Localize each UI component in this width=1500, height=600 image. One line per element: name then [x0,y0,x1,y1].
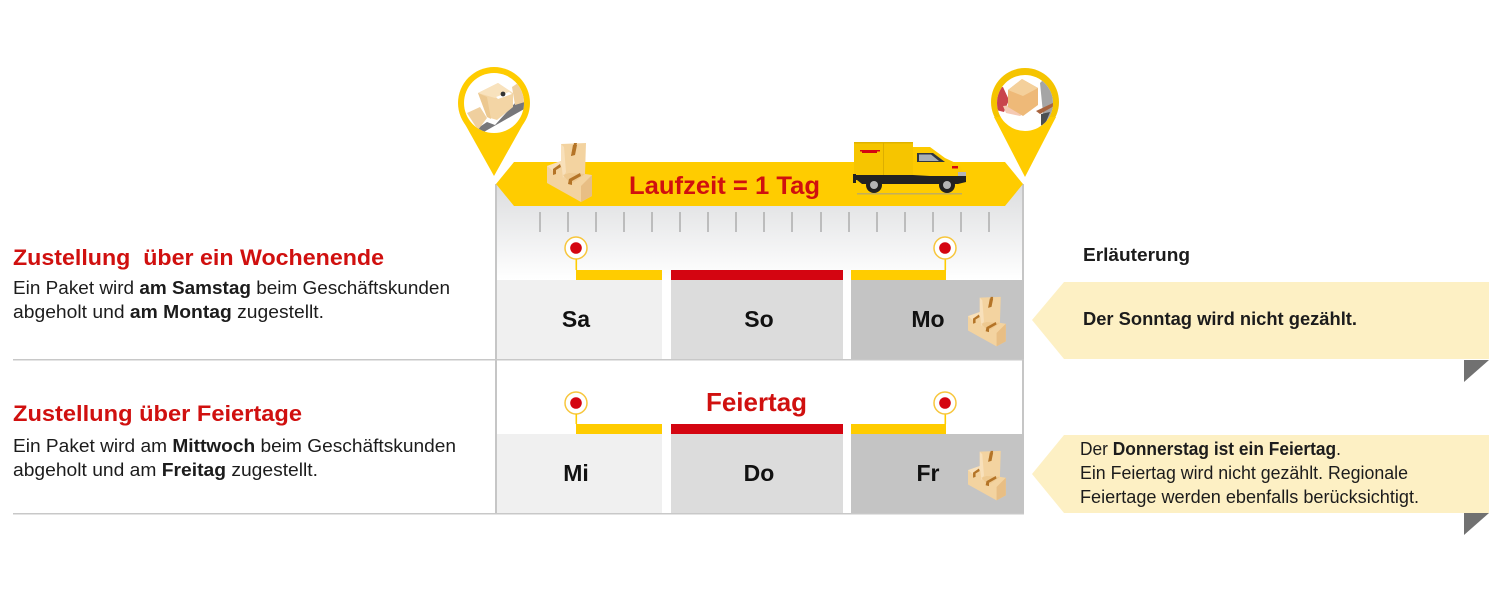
icon: parcels at Monday [968,297,1006,346]
row 2: day cells: Fr [916,460,940,486]
scale tick marks [540,212,989,232]
icon: parcels on banner [547,143,592,202]
callout: public holiday: Feiertage werden ebenfalls berücksichtigt. [1080,487,1419,507]
banner: Laufzeit [496,162,1023,206]
text block: holiday delivery [13,401,456,480]
row 1: day cells: Mo [911,306,945,332]
text block: weekend delivery: Ein Paket wird am Samstag beim Geschäftskunden [13,278,450,298]
callout: Sunday: Der Sonntag wird nicht gezählt. [1083,309,1357,329]
text block: holiday delivery: Ein Paket wird am Mittwoch beim Geschäftskunden [13,436,456,456]
pin: pickup with parcels on conveyor [458,67,530,176]
pin: delivery handover [991,68,1059,177]
row 1: day cells [497,280,1024,359]
bottom divider [13,513,1024,514]
row 2: timeline markers [565,392,956,434]
row 2: day cells: Do [744,460,774,486]
callout: public holiday [1032,435,1489,535]
heading: Erläuterung: Erläuterung [1083,245,1190,265]
banner: Laufzeit: Laufzeit = 1 Tag [629,172,820,200]
callout: public holiday: Ein Feiertag wird nicht gezählt. Regionale [1080,463,1408,483]
label: Feiertag: Feiertag [706,387,807,417]
icon: DHL van [853,142,966,194]
icon: parcels at Friday [968,451,1006,500]
row 2: day cells [497,434,1024,513]
callout: public holiday: Der Donnerstag ist ein Feiertag. [1080,439,1341,459]
callout: Sunday [1032,282,1489,382]
text block: weekend delivery: abgeholt und am Montag zugestellt. [13,302,324,322]
row 1: day cells: Sa [562,306,590,332]
text block: holiday delivery: Zustellung über Feiertage [13,401,302,426]
row 2: day cells: Mi [563,460,589,486]
text block: holiday delivery: abgeholt und am Freitag zugestellt. [13,460,318,480]
row 1: day cells: So [744,306,774,332]
text block: weekend delivery: Zustellung über ein Wochenende [13,245,384,270]
divider between rows [13,359,1024,360]
row 1: timeline markers [565,237,956,280]
text block: weekend delivery [13,245,450,322]
timeline panel background [495,184,1024,514]
